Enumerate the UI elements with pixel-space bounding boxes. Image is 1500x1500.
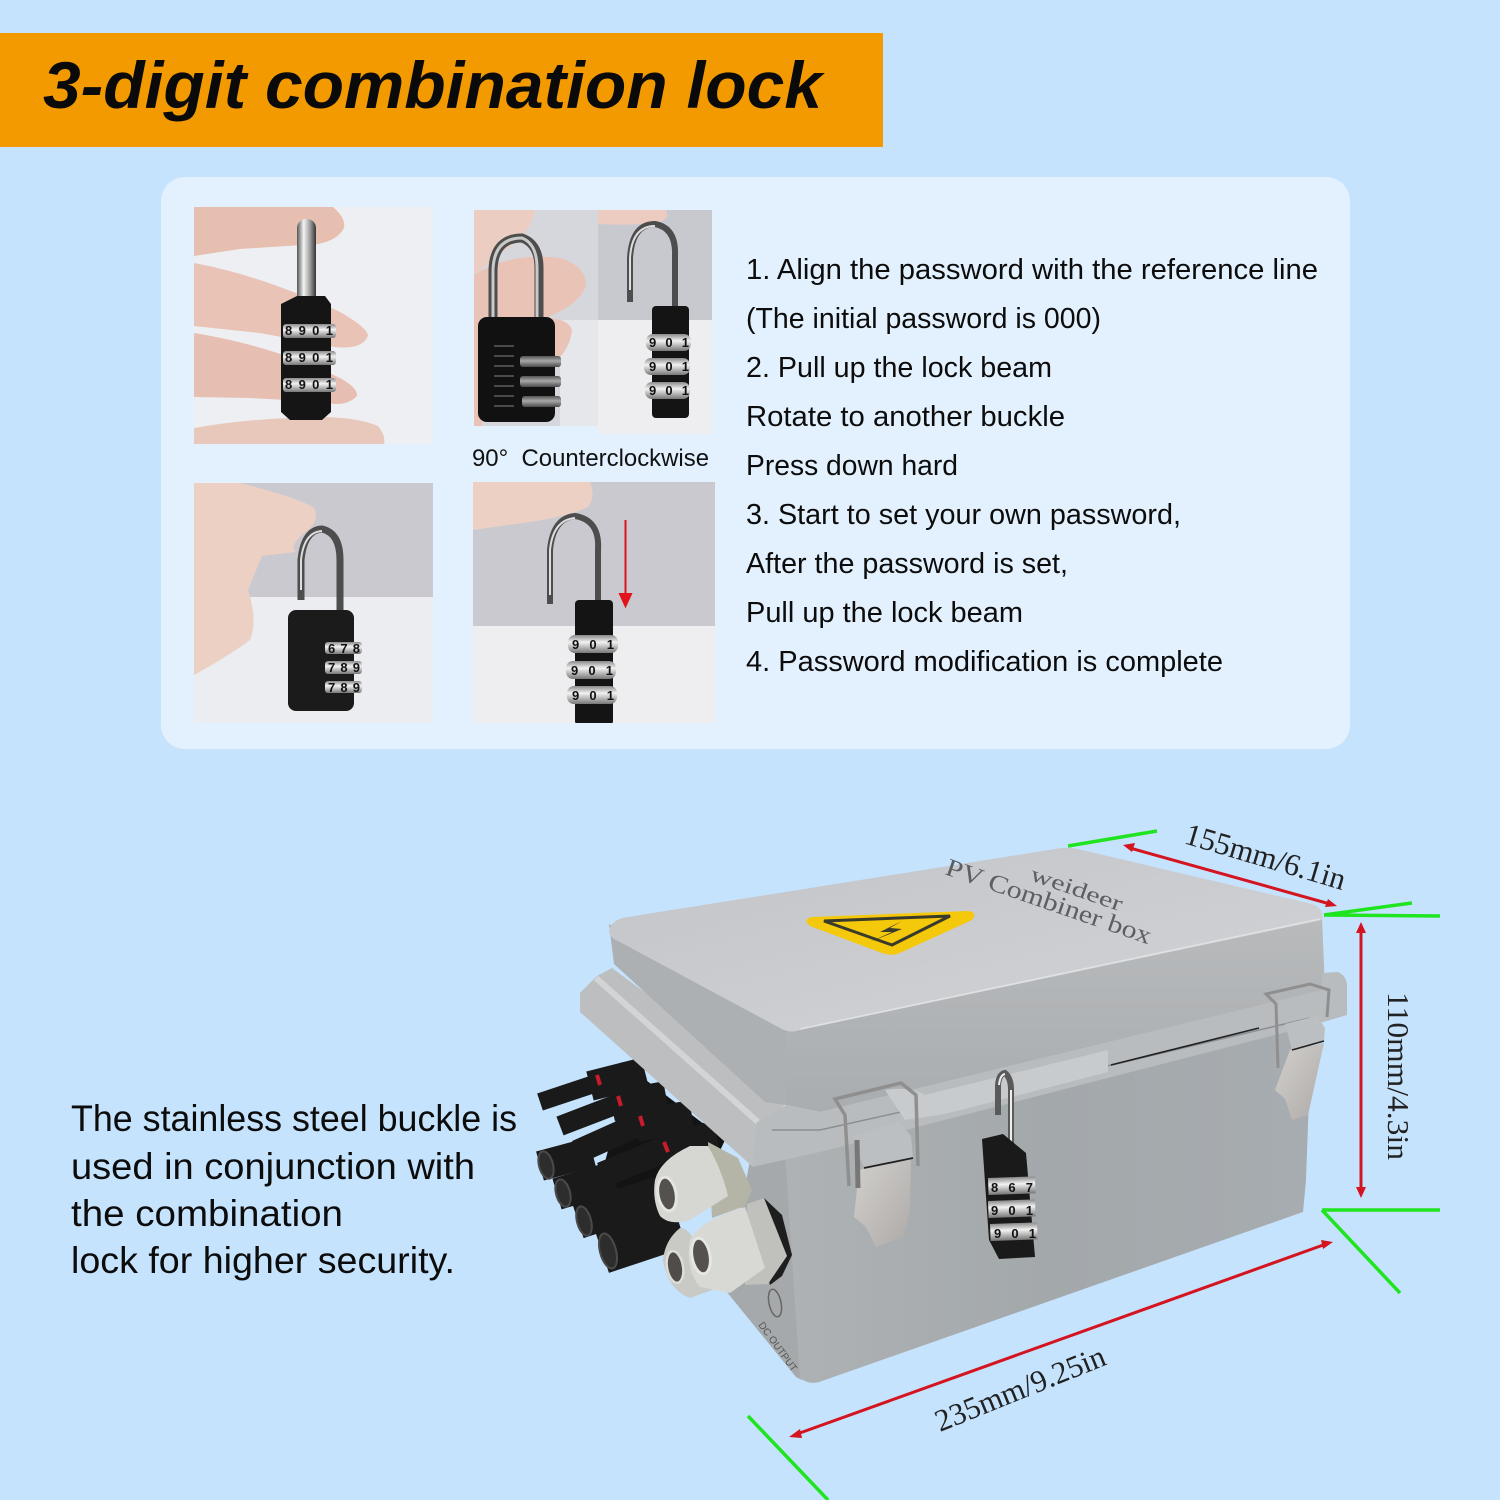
- instruction steps text: After the password is set,: [746, 548, 1068, 580]
- instruction steps text: Pull up the lock beam: [746, 597, 1023, 629]
- box side wall: [726, 1148, 802, 1380]
- lid side face: [609, 924, 792, 1105]
- photo: lock side view shackle raised: 9 0 1: [649, 335, 689, 350]
- title banner: [0, 33, 883, 147]
- latch: left: [835, 1083, 918, 1247]
- instruction steps text: Rotate to another buckle: [746, 401, 1065, 433]
- text block: stainless steel buckle: The stainless steel buckle is: [71, 1098, 517, 1139]
- photo: lock side view shackle raised: [598, 210, 712, 434]
- combination padlock on box: 9 0 1: [994, 1226, 1036, 1241]
- side markings: DC OUTPUT: [756, 1320, 799, 1374]
- box front wall: [785, 1015, 1312, 1383]
- connectors: MC4 plugs and sockets: [536, 1062, 725, 1270]
- photo: lock held closed in fingers: 8 9 0 1: [285, 350, 333, 365]
- side markings: [756, 1288, 799, 1374]
- photo: pressing the shackle down: [473, 482, 715, 725]
- title: 3-digit combination lock: [43, 48, 825, 122]
- green extension lines: [748, 831, 1440, 1500]
- text block: stainless steel buckle: used in conjunction with: [71, 1146, 475, 1187]
- instruction steps text: 4. Password modification is complete: [746, 646, 1223, 678]
- photo: lock side view shackle raised: 9 0 1: [649, 383, 689, 398]
- photo: pressing the shackle down: 9 0 1: [572, 637, 614, 652]
- photo: rotating the shackle: [194, 483, 433, 723]
- warning label: [806, 911, 974, 955]
- dimension: width: 235mm/9.25in: [930, 1338, 1111, 1438]
- combination padlock on box: 9 0 1: [991, 1203, 1033, 1218]
- instruction steps text: Press down hard: [746, 450, 958, 482]
- panel: password instructions: [161, 177, 1350, 749]
- photo: rotating the shackle: 7 8 9: [328, 680, 360, 695]
- combination padlock on box: [982, 1073, 1038, 1259]
- lid front face: [786, 918, 1325, 1112]
- arrow: push down: [620, 520, 631, 606]
- photo: lock held closed in fingers: 8 9 0 1: [285, 377, 333, 392]
- photo: lock front held by shackle: [474, 210, 598, 426]
- lid top face: [609, 848, 1322, 1032]
- instruction steps text: 1. Align the password with the reference line: [746, 254, 1318, 286]
- rim boss: [885, 1050, 1108, 1120]
- gloss along lid edge: [800, 919, 1320, 1029]
- rim slot: [1111, 1028, 1259, 1065]
- photo: lock side view shackle raised: 9 0 1: [649, 359, 689, 374]
- photo: rotating the shackle: 6 7 8: [328, 641, 360, 656]
- text block: stainless steel buckle: the combination: [71, 1193, 343, 1234]
- photo: lock held closed in fingers: [194, 207, 433, 444]
- flange left strip: [580, 968, 790, 1167]
- photo: pressing the shackle down: 9 0 1: [572, 688, 614, 703]
- photo: lock held closed in fingers: 8 9 0 1: [285, 323, 333, 338]
- instruction steps text: (The initial password is 000): [746, 303, 1101, 335]
- product: PV combiner box: [536, 848, 1347, 1383]
- instruction steps text: 2. Pull up the lock beam: [746, 352, 1052, 384]
- instruction steps text: 3. Start to set your own password,: [746, 499, 1181, 531]
- latch: right: [1266, 984, 1329, 1120]
- flange front rim: [752, 972, 1347, 1167]
- photo: pressing the shackle down: 9 0 1: [571, 663, 613, 678]
- dimension: height: 110mm/4.3in: [1381, 992, 1416, 1160]
- text block: stainless steel buckle: lock for higher security.: [71, 1240, 455, 1281]
- instruction steps text: [746, 254, 1318, 678]
- dimension: depth: [1123, 816, 1351, 907]
- caption: rotation direction: 90° Counterclockwise: [472, 445, 709, 472]
- dimension: depth: 155mm/6.1in: [1181, 816, 1351, 897]
- lid lettering: weideer: [1027, 861, 1127, 916]
- photo: rotating the shackle: 7 8 9: [328, 660, 360, 675]
- text block: stainless steel buckle: [71, 1098, 517, 1281]
- combination padlock on box: 8 6 7: [991, 1180, 1033, 1195]
- dimension: height: [1356, 922, 1416, 1198]
- dimension: width: [789, 1240, 1333, 1438]
- cable glands: [654, 1142, 792, 1298]
- lid lettering: PV Combiner box: [942, 854, 1156, 950]
